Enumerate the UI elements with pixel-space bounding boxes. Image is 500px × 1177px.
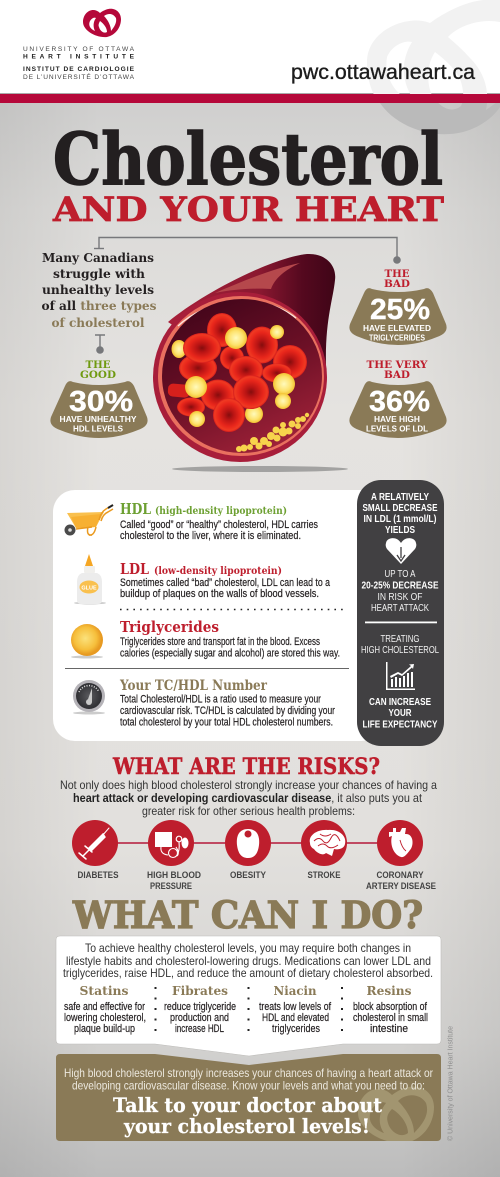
logo text: DE L’UNIVERSITÉ D’OTTAWA [23, 72, 135, 81]
badge: the very bad: 36% [369, 386, 430, 418]
panel: dark facts column: SMALL DECREASE [362, 503, 438, 514]
panel: dark facts column: IN LDL (1 mmol/L) [364, 514, 436, 525]
resins: block absorption of [353, 1001, 428, 1013]
badge: the very bad: HAVE HIGH [374, 414, 420, 424]
badge: the bad [349, 268, 447, 345]
intro text: Many Canadians [42, 250, 154, 265]
statins: Statins [80, 983, 128, 998]
call to action text: High blood cholesterol strongly increases your chances of having a heart attack or [64, 1066, 433, 1080]
logo [23, 9, 135, 81]
risk labels: ARTERY DISEASE [366, 881, 436, 891]
triglycerides entry [71, 618, 340, 660]
niacin: triglycerides [272, 1023, 320, 1035]
intro text: struggle with [53, 266, 145, 281]
statins [64, 983, 146, 1035]
call to action text: developing cardiovascular disease. Know your levels and what you need to do: [72, 1078, 425, 1092]
logo text: HEART INSTITUTE [23, 54, 135, 60]
panel: dark facts column: YIELDS [385, 525, 415, 536]
hdl entry [64, 500, 318, 542]
panel: cholesterol types [53, 490, 383, 741]
risks icon row [72, 820, 436, 891]
copyright: © University of Ottawa Heart Institute [446, 1026, 454, 1141]
risk labels: STROKE [308, 870, 340, 880]
icon: anatomical heart [377, 820, 423, 866]
risk labels [78, 870, 436, 891]
fibrates: production and [170, 1012, 229, 1024]
risks intro text: greater risk for other serious health problems: [142, 804, 355, 818]
website url: pwc.ottawaheart.ca [291, 61, 475, 84]
panel: dark facts column: TREATING [380, 634, 420, 645]
resins [353, 983, 428, 1035]
call to action headline: your cholesterol levels! [123, 1115, 370, 1138]
vessel opening [153, 292, 327, 462]
badge: the good: HDL LEVELS [73, 424, 123, 434]
risk labels: PRESSURE [150, 881, 192, 891]
ldl entry: Sometimes called “bad” cholesterol, LDL can lead to a [120, 577, 331, 589]
heading: what are the risks: WHAT ARE THE RISKS? [112, 754, 380, 780]
intro text: unhealthy levels [42, 282, 154, 297]
tc/hdl entry: cardiovascular risk. TC/HDL is calculated by dividing your [120, 705, 335, 717]
fibrates: reduce triglyceride [164, 1001, 236, 1013]
treatment intro text: To achieve healthy cholesterol levels, you may require both changes in [85, 941, 411, 955]
resins: cholesterol in small [353, 1012, 428, 1024]
panel: dark facts column: HEART ATTACK [371, 603, 429, 614]
icon: gauge [73, 680, 105, 714]
fibrates: increase HDL [175, 1023, 224, 1035]
icon: heart with down arrow [386, 538, 416, 564]
risk labels: HIGH BLOOD [147, 870, 201, 880]
panel: dark facts column: 20-25% DECREASE [362, 580, 439, 592]
logo text [23, 46, 135, 81]
badge: the bad: BAD [384, 278, 410, 290]
intro text: of cholesterol [52, 315, 145, 330]
icon: heart logo [83, 9, 121, 37]
panel: dark facts column: IN RISK OF [378, 592, 423, 603]
icon: wheelbarrow [64, 505, 113, 536]
panel: dark facts column: YOUR [388, 708, 412, 719]
intro text [42, 250, 156, 330]
icon: fat globule [71, 624, 103, 658]
badge: the bad: THE [384, 268, 410, 280]
badge: the very bad [349, 359, 447, 438]
risks intro text [60, 778, 437, 818]
treatment intro text [63, 941, 433, 980]
panel: dark facts column [357, 480, 444, 746]
triglycerides entry: Triglycerides [120, 618, 219, 636]
plaque deposit [236, 413, 309, 452]
vessel body [168, 254, 335, 370]
hdl entry: HDL [120, 500, 151, 518]
vessel shadow [172, 466, 348, 472]
ldl entry: (low-density lipoprotein) [154, 566, 282, 577]
tc/hdl entry: total cholesterol by your total HDL cholesterol numbers. [120, 716, 333, 728]
statins: safe and effective for [64, 1001, 145, 1013]
risks intro text: Not only does high blood cholesterol strongly increase your chances of having a [60, 778, 437, 792]
badge: the bad: TRIGLYCERIDES [369, 332, 425, 342]
icon: obesity scale [225, 820, 271, 866]
ldl entry [74, 554, 331, 604]
title [52, 117, 444, 230]
icon: stroke brain [301, 820, 347, 866]
niacin: Niacin [274, 983, 316, 998]
title: Cholesterol [53, 117, 443, 201]
badge: the bad: HAVE ELEVATED [363, 323, 431, 333]
hdl entry: cholesterol to the liver, where it is eliminated. [120, 530, 301, 542]
call to action headline: Talk to your doctor about [113, 1094, 382, 1117]
fibrates [164, 983, 236, 1035]
treatment intro text: lifestyle habits and cholesterol-lowering drugs. Medications can lower LDL and [66, 954, 431, 968]
badge: the good [50, 359, 148, 438]
watermark: heart rings top right [367, 0, 500, 134]
call to action headline [113, 1094, 382, 1138]
ldl entry: LDL [120, 560, 149, 578]
icon: glue bottle [74, 554, 106, 604]
panel: treatment options [56, 936, 441, 1056]
badge: the very bad: BAD [384, 369, 410, 381]
risk labels: DIABETES [78, 870, 118, 880]
statins: plaque build-up [74, 1023, 135, 1035]
logo text: UNIVERSITY OF OTTAWA [23, 46, 135, 53]
red blood cells and fat globules [167, 313, 307, 432]
fibrates: Fibrates [172, 983, 228, 998]
niacin [259, 983, 332, 1035]
call to action text [64, 1066, 433, 1092]
icon: diabetes syringe [72, 820, 118, 866]
treatment intro text: triglycerides, raise HDL, and reduce the amount of dietary cholesterol absorbed. [63, 966, 433, 980]
logo text: INSTITUT DE CARDIOLOGIE [23, 66, 135, 73]
header band [0, 0, 500, 103]
tc/hdl entry: Your TC/HDL Number [119, 678, 268, 694]
icon: glue bottle: GLUE [81, 586, 97, 592]
risks intro text: heart attack or developing cardiovascular disease, it also puts you at [73, 791, 423, 805]
panel: dark facts column: A RELATIVELY [371, 492, 429, 503]
panel: dark facts column: CAN INCREASE [369, 697, 431, 708]
risk labels: CORONARY [376, 870, 424, 880]
icon: rising bar chart [386, 662, 415, 690]
connector lines [94, 238, 401, 354]
badge: the bad: 25% [370, 294, 430, 326]
badge: the very bad: THE VERY [366, 359, 428, 371]
illustration: blood vessel [153, 254, 348, 472]
risk labels: OBESITY [230, 870, 266, 880]
vessel inner highlight [215, 263, 300, 293]
niacin: HDL and elevated [262, 1012, 329, 1024]
panel: dark facts column: HIGH CHOLESTEROL [361, 645, 439, 656]
tc/hdl entry: Total Cholesterol/HDL is a ratio used to measure your [120, 694, 321, 706]
badge: the very bad: LEVELS OF LDL [366, 424, 428, 434]
resins: intestine [370, 1023, 408, 1035]
tc/hdl entry [73, 678, 335, 728]
heading: what can i do: WHAT CAN I DO? [72, 893, 423, 937]
hdl entry: Called “good” or “healthy” cholesterol, HDL carries [120, 519, 318, 531]
title: AND YOUR HEART [52, 190, 444, 230]
statins: lowering cholesterol, [64, 1012, 146, 1024]
resins: Resins [366, 983, 412, 998]
triglycerides entry: Triglycerides store and transport fat in the blood. Excess [120, 636, 320, 648]
icon: blood pressure cuff [148, 820, 194, 866]
triglycerides entry: calories (especially sugar and alcohol) are stored this way. [120, 648, 340, 660]
panel: call to action [56, 1054, 441, 1143]
intro text: of all three types [42, 298, 156, 313]
badge: the good: GOOD [80, 369, 116, 381]
badge: the good: HAVE UNHEALTHY [60, 414, 137, 424]
watermark: heart rings [358, 1087, 434, 1143]
niacin: treats low levels of [259, 1001, 332, 1013]
panel: dark facts column: LIFE EXPECTANCY [362, 720, 438, 730]
ldl entry: buildup of plaques on the walls of blood vessels. [120, 588, 319, 600]
hdl entry: (high-density lipoprotein) [155, 506, 287, 517]
badge: the good: THE [86, 359, 110, 371]
panel: dark facts column: UP TO A [384, 569, 416, 580]
badge: the good: 30% [69, 386, 133, 418]
